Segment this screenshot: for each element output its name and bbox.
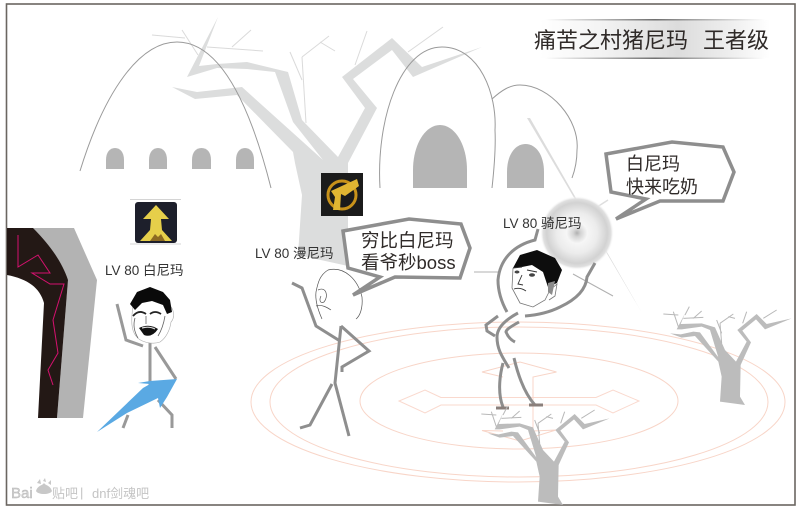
title	[534, 19, 770, 59]
watermark: |	[80, 485, 83, 500]
cave domes	[80, 42, 577, 188]
label: rider nima: LV 80 骑尼玛	[503, 216, 582, 231]
speech bubble: comic nima: 穷比白尼玛	[361, 230, 454, 251]
tree: foreground centre	[481, 407, 610, 505]
speech bubble: comic nima: 看爷秒boss	[361, 252, 456, 273]
face: rider meme	[512, 250, 562, 307]
magic circle	[251, 322, 785, 482]
icon: upward arrow skill	[130, 200, 181, 244]
icon: gold gun skill	[321, 173, 363, 216]
label: comic nima: LV 80 漫尼玛	[255, 246, 334, 261]
tree: foreground right	[663, 307, 792, 405]
face: bald outline head	[316, 269, 362, 319]
glowing orb	[540, 196, 614, 270]
watermark	[11, 478, 149, 502]
watermark: Bai	[11, 485, 33, 502]
speech bubble: comic nima	[343, 219, 470, 295]
stick figure: comic nima	[292, 283, 369, 436]
stick figure: white nima	[117, 304, 176, 428]
arrow: blue dash	[97, 379, 177, 432]
speech bubble: rider nima: 快来吃奶	[626, 177, 698, 197]
face: laughing meme	[130, 287, 174, 343]
light beams	[474, 118, 642, 313]
speech bubble: rider nima: 白尼玛	[626, 154, 680, 174]
cave windows	[106, 125, 544, 188]
watermark: dnf剑魂吧	[92, 486, 149, 501]
background tree	[152, 17, 482, 266]
watermark: 贴吧	[52, 486, 78, 501]
stick figure: rider nima	[486, 229, 595, 408]
speech bubble: rider nima	[606, 142, 734, 219]
gate	[7, 228, 97, 418]
title: 王者级	[703, 28, 769, 53]
label: white nima: LV 80 白尼玛	[105, 263, 184, 278]
title: 痛苦之村猪尼玛	[534, 28, 688, 53]
